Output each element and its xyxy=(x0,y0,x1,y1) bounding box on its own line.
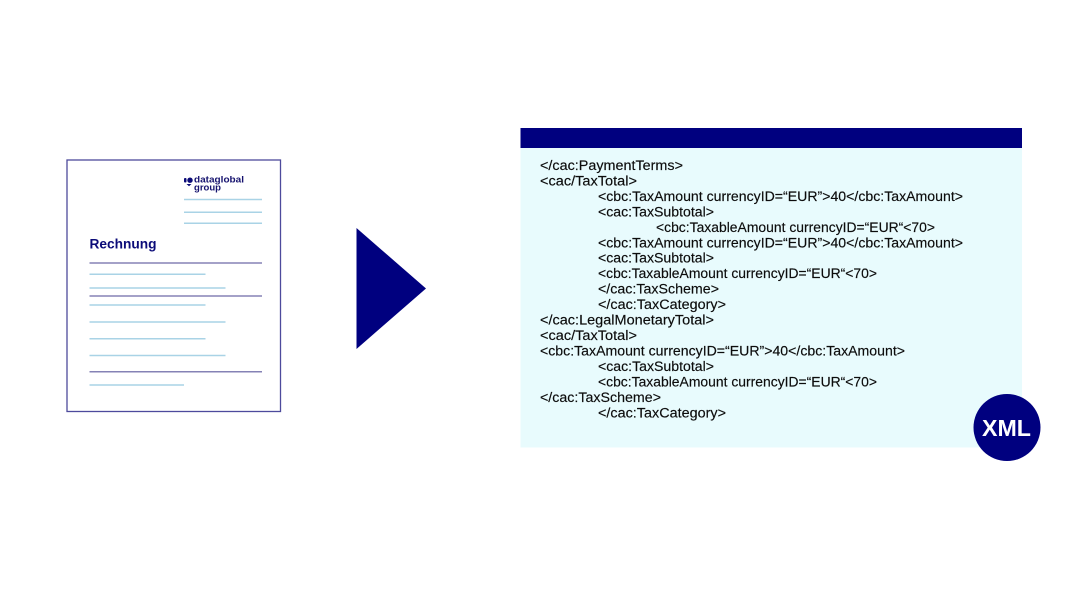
arrow: conversion triangle xyxy=(356,228,426,349)
XML code text: <cbc:TaxAmount currencyID=“EUR”>40</cbc:TaxAmount> xyxy=(598,236,963,250)
panel: invoice document xyxy=(67,160,280,412)
XML code text: <cbc:TaxableAmount currencyID=“EUR“<70> xyxy=(598,374,877,390)
panel: XML code window xyxy=(520,128,1022,448)
XML code text: <cac/TaxTotal> xyxy=(540,174,637,188)
XML code text: <cac/TaxTotal> xyxy=(540,328,637,343)
XML code text: </cac:TaxCategory> xyxy=(598,406,726,420)
code background xyxy=(520,148,1022,448)
address lines xyxy=(184,200,262,223)
logo: dataglobal group xyxy=(184,174,244,194)
badge: XML: XML xyxy=(982,415,1031,441)
XML code text: <cac:TaxSubtotal> xyxy=(598,359,714,374)
XML code text: </cac:PaymentTerms> xyxy=(540,158,683,173)
XML code text: <cbc:TaxAmount currencyID=“EUR”>40</cbc:TaxAmount> xyxy=(598,189,963,204)
XML code text: <cac:TaxSubtotal> xyxy=(598,250,714,266)
XML code text: <cbc:TaxAmount currencyID=“EUR”>40</cbc:TaxAmount> xyxy=(540,344,905,358)
XML code text: </cac:LegalMonetaryTotal> xyxy=(540,312,714,328)
XML code text: </cac:TaxCategory> xyxy=(598,297,726,312)
XML code text: </cac:TaxScheme> xyxy=(598,282,719,296)
invoice body lines xyxy=(90,263,262,385)
heading: Rechnung: Rechnung xyxy=(90,236,156,252)
window title bar xyxy=(520,128,1022,148)
logo: dataglobal group: group xyxy=(194,182,221,194)
logo: dataglobal group: dataglobal xyxy=(194,174,244,186)
XML code text: <cbc:TaxableAmount currencyID=“EUR“<70> xyxy=(598,266,877,281)
XML code text: </cac:TaxScheme> xyxy=(540,390,661,405)
XML code text: <cac:TaxSubtotal> xyxy=(598,204,714,220)
XML code text: <cbc:TaxableAmount currencyID=“EUR“<70> xyxy=(656,220,935,235)
badge: XML xyxy=(974,394,1040,461)
XML code text xyxy=(540,158,963,420)
